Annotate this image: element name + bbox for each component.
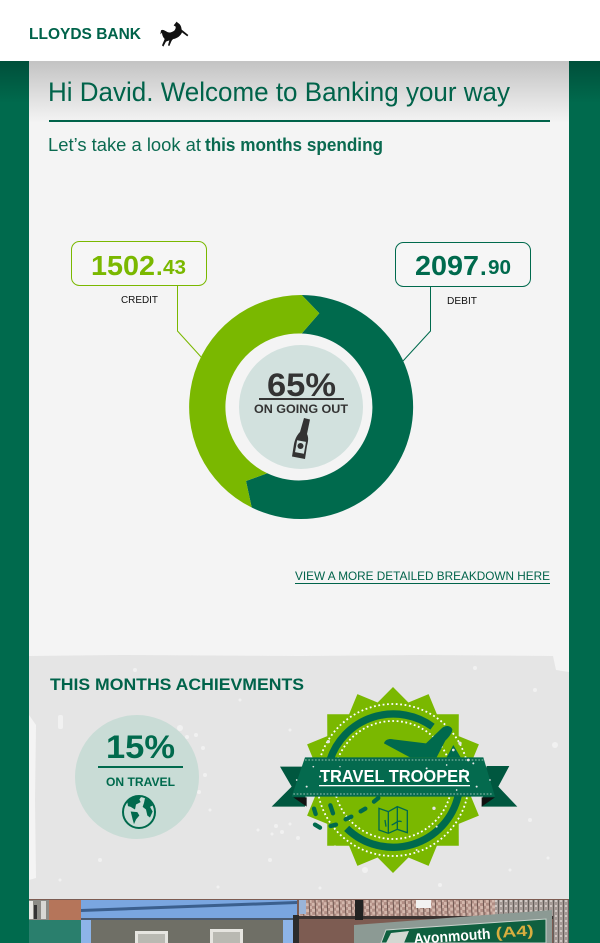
left wall and roof: [29, 920, 81, 943]
travel stat circle: [75, 715, 199, 839]
subheading: [48, 135, 383, 155]
breakdown link: VIEW A MORE DETAILED BREAKDOWN HERE: [295, 569, 550, 583]
texture speckles: [58, 666, 558, 890]
windows: [135, 931, 168, 943]
heading: THIS MONTHS ACHIEVMENTS: [50, 675, 304, 694]
icon: plane: [384, 726, 452, 757]
credit callout: .: [156, 254, 163, 281]
logo wordmark: LLOYDS BANK: [29, 26, 141, 43]
travel stat circle: 15%: [106, 729, 175, 765]
donut chart: [189, 295, 413, 519]
panel: achievements: [29, 655, 569, 899]
flight dashes: [314, 798, 378, 828]
badge starburst: [300, 687, 486, 873]
photo: street with road sign: [29, 899, 569, 943]
tiled roof: [299, 900, 495, 918]
icon: black horse: [160, 22, 188, 47]
subheading: this months spending: [205, 135, 383, 155]
header bar: [0, 0, 600, 61]
credit callout: 43: [163, 257, 186, 279]
icon: map: [379, 807, 407, 833]
travel stat circle: ON TRAVEL: [106, 775, 175, 789]
badge speckles: [296, 740, 491, 851]
debit callout: .: [480, 254, 487, 281]
centre circle: [239, 345, 363, 469]
icon: globe: [123, 796, 155, 828]
debit callout: 2097: [415, 250, 479, 281]
debit segment: [246, 295, 413, 519]
centre stat: [254, 367, 349, 416]
subheading: Let’s take a look at: [48, 135, 201, 155]
icon: bottle: [292, 418, 310, 459]
badge ring: [330, 714, 458, 847]
ribbon band: [292, 757, 495, 797]
debit callout: [396, 242, 530, 361]
title: Hi David. Welcome to Banking your way: [48, 77, 510, 107]
credit callout: [72, 242, 206, 358]
debit callout: DEBIT: [447, 295, 478, 307]
ribbon tails: [272, 767, 307, 807]
credit segment: [189, 295, 319, 508]
centre stat: ON GOING OUT: [254, 402, 349, 416]
centre stat: 65%: [267, 367, 336, 403]
road sign: [354, 910, 552, 943]
credit callout: CREDIT: [121, 294, 159, 306]
debit callout: 90: [488, 257, 511, 279]
ribbon label: TRAVEL TROOPER: [320, 766, 470, 786]
photo: street with road sign: (A4): [495, 922, 534, 942]
blue building: [81, 920, 294, 943]
credit callout: 1502: [91, 250, 155, 281]
travel trooper badge: [272, 687, 517, 873]
